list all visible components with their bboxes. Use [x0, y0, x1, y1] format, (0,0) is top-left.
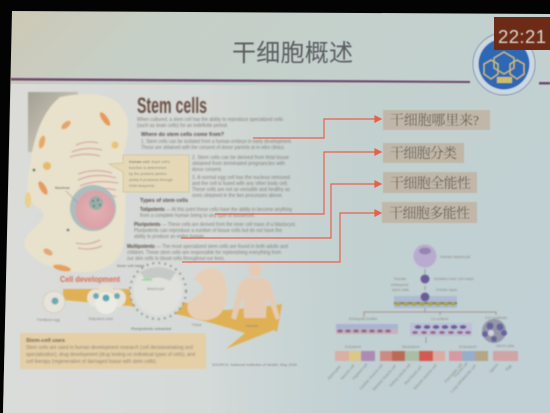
tissue image strips [335, 351, 518, 361]
callout: human cell: DNA blueprints. [129, 184, 155, 188]
blastocyst: Inner cell mass [117, 264, 144, 268]
human embryonic stem cells on feeder layer: stem cells [392, 288, 409, 292]
panel: cell development [37, 263, 282, 349]
clock badge: 22:21 [498, 26, 546, 47]
fetus [187, 268, 227, 327]
human embryonic stem cells on feeder layer [391, 277, 458, 308]
section: where do stem cells come from: Where do stem cells come from? [141, 132, 224, 138]
label box: totipotency: 干细胞全能性 [390, 175, 471, 192]
arrows: red connectors [181, 116, 381, 262]
blastocyst: Pluripotents extracted [131, 327, 172, 331]
section: types of stem cells: from a complete human being to any type of tissue/cell. [140, 213, 255, 219]
co-culture [410, 317, 472, 343]
totipotent cells: Totipotent cells [88, 317, 113, 321]
callout: human cell: by the proteins (amino [129, 172, 167, 176]
label box: where stem cells come from: 干细胞哪里来? [390, 112, 479, 129]
arrow: classification [215, 149, 381, 214]
totipotent cells [87, 284, 126, 321]
3-D scaffolds [482, 316, 507, 343]
panel: stem cells text [127, 93, 296, 262]
germ layer labels [345, 344, 514, 349]
co-culture: Co-culture [431, 317, 449, 321]
rotated cell type labels: Thyroid cell [453, 361, 469, 379]
section: types of stem cells: Totipotents — At this point these cells have the ability to become anything [140, 207, 292, 213]
callout: human cell: function is determined [129, 166, 166, 170]
blastocyst: Blastocyst [147, 287, 165, 291]
germ layer labels: Germ cells [496, 344, 514, 348]
3-D scaffolds: 3-D scaffolds [485, 316, 507, 320]
section: where do stem cells come from [141, 132, 292, 199]
germ layer labels: Mesoderm [402, 345, 420, 349]
blastocyst [117, 263, 186, 331]
label box: pluripotency: 干细胞多能性 [389, 205, 470, 222]
section: where do stem cells come from: 1. Stem cells can be isolated from a human embryo in early development. [141, 139, 292, 145]
fertilized egg [37, 291, 65, 322]
label box: classification: 干细胞分类 [390, 145, 457, 162]
intro text: (such as brain cells) for an indefinite period. [137, 123, 228, 129]
label box: where stem cells come from [383, 110, 490, 130]
label box: totipotency [383, 172, 477, 193]
rotated cell type labels: Sperm [489, 363, 499, 374]
heading: cell development: Cell development [60, 275, 120, 284]
section: where do stem cells come from: and the cell is fused with any other body cell. [192, 181, 288, 187]
arrow: pluripotency [182, 210, 381, 262]
section: types of stem cells: our skin cells to blood cells throughout our lives. [127, 256, 225, 262]
fertilized egg: Fertilized egg [37, 318, 60, 322]
section: types of stem cells: ability to produce an entire human. [134, 234, 205, 240]
grey image corner [28, 92, 78, 152]
label box: pluripotency [382, 202, 477, 223]
intro text: When cultured, a stem cell has the ability to reproduce specialized cells [137, 117, 283, 123]
section: where do stem cells come from: These cells are not as versatile and healthy as [192, 187, 290, 193]
rotated cell type labels: Pancreatic cell [444, 363, 463, 384]
intro text [137, 117, 283, 129]
isolated inner cell mass [420, 274, 474, 290]
callout: human cell: acids) it produces through [129, 178, 173, 182]
panel: stem-cell uses [20, 333, 206, 369]
section: where do stem cells come from: ones obtained in the two processes above. [192, 193, 283, 199]
rotated cell type labels: Egg [505, 364, 512, 372]
human blastocyst: Human blastocyst [440, 255, 471, 259]
source note: SOURCE: National Institutes of Health, May 2000 [212, 363, 297, 367]
human figure [231, 264, 280, 328]
rotated cell type labels: Skeletal muscle cell [372, 364, 397, 392]
rotated cell type labels: Pigment cell [352, 363, 369, 381]
arrow: totipotency [181, 181, 381, 238]
human embryonic stem cells on feeder layer: Feeder layer [436, 288, 458, 292]
clock badge [494, 17, 550, 50]
heading: stem cells: Stem cells [137, 93, 207, 118]
human figure: Human [246, 324, 258, 328]
section: where do stem cells come from: 3. A normal egg cell has the nucleus removed [192, 175, 290, 181]
section: types of stem cells: Pluripotents — These cells are derived from the inner cell mass of a blastocyst. [134, 222, 296, 228]
nucleus [66, 185, 116, 231]
panel: stem-cell uses: Stem cells are used in human development research (cell decisionmaking and [26, 345, 193, 351]
panel: stem cell illustration [24, 92, 189, 273]
section: types of stem cells: Pluripotents can reproduce a number of tissue cells but do not have the [134, 228, 282, 234]
rotated cell type labels: Kidney tubule cell [389, 363, 412, 388]
arrow: where from [253, 116, 381, 138]
section: where do stem cells come from: 2. Stem cells can be derived from fetal tissue [192, 155, 289, 161]
section: types of stem cells [127, 198, 296, 262]
endoplasmic reticulum [70, 142, 118, 249]
section: where do stem cells come from: These are obtained with the consent of donor parents at in-vitro clinics. [141, 145, 285, 151]
callout: human cell [109, 155, 189, 192]
section: types of stem cells: Multipotents — The most specialized stem cells are found in both adults and [127, 244, 288, 250]
rotated cell type labels [327, 361, 512, 394]
rotated cell type labels: Cardiac muscle cell [359, 363, 384, 391]
section: types of stem cells: children. These stem cells are responsible for replenishing everything from [127, 250, 281, 256]
rotated cell type labels: Lung cell/alveolar cell [450, 364, 477, 394]
panel: stem-cell uses: cell therapy (regeneration of damaged tissue with stem cells). [26, 359, 157, 365]
rotated cell type labels: Smooth muscle cell [413, 363, 438, 391]
section: where do stem cells come from: obtained from terminated pregnancies with [192, 161, 285, 167]
germ layer labels: Endoderm [459, 345, 477, 349]
section: where do stem cells come from: donor consent. [192, 167, 222, 173]
rotated cell type labels: Astrocytes [327, 365, 342, 381]
panel: differentiation diagram [327, 244, 518, 394]
human embryonic stem cells on feeder layer: embryonic [391, 283, 409, 287]
title: 干细胞概述 [232, 40, 353, 67]
organelles [25, 111, 118, 273]
label: nucleus: Nucleus [55, 186, 70, 190]
callout: human cell: Human cell: Each cell's [129, 160, 170, 164]
panel: stem-cell uses: specialization), drug development (drug testing on individual types of cells), and [26, 352, 195, 358]
section: types of stem cells: Types of stem cells [140, 198, 188, 204]
title divider line [11, 78, 550, 84]
fetus: Fetus [192, 323, 202, 327]
embryoid bodies: Embryoid bodies [349, 317, 377, 321]
isolated inner cell mass: Isolated inner cell mass [434, 277, 474, 281]
germ layer labels: Ectoderm [345, 345, 361, 349]
cell body [24, 94, 128, 272]
panel: stem-cell uses: Stem-cell uses [26, 338, 65, 344]
rotated cell type labels: Red blood cell [404, 365, 423, 386]
rotated cell type labels: Neuron cell [340, 364, 356, 381]
label box: classification [383, 143, 464, 163]
human blastocyst [414, 244, 471, 274]
branching connector [364, 308, 496, 317]
embryoid bodies [336, 317, 398, 334]
human embryonic stem cells on feeder layer: Human [394, 277, 406, 281]
icon: institution logo [473, 33, 535, 95]
development arrow [63, 289, 282, 349]
